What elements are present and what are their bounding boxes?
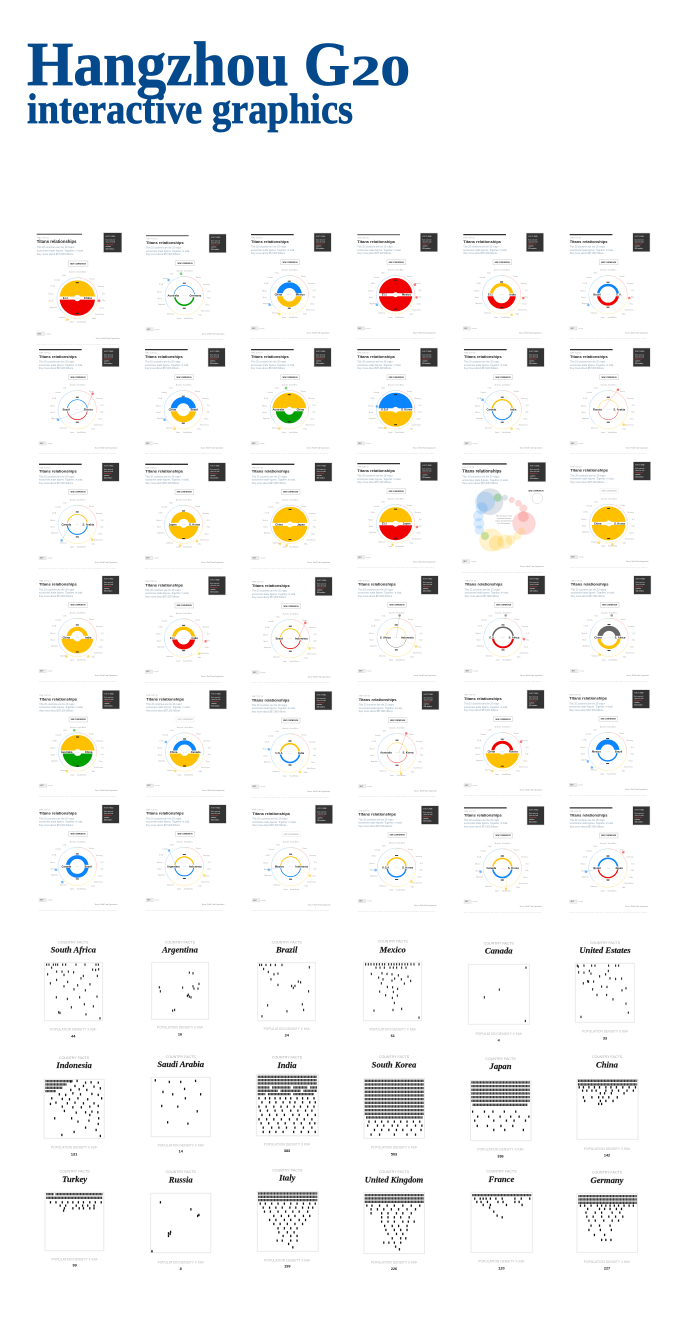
panel: China vs S. Korea	[570, 462, 651, 569]
chord: China vs Canada: China	[170, 750, 178, 754]
panel: Brazil vs Russia	[39, 348, 119, 455]
population dots	[578, 1196, 637, 1241]
chord: Australia vs China: China	[85, 750, 93, 754]
chord: E.U. vs India: India	[191, 636, 198, 640]
country facts: Brazil: POPULATION DENSITY X KM²	[264, 1027, 311, 1031]
country facts: Germany	[577, 1171, 638, 1270]
panel title: Titans relationships	[145, 469, 184, 474]
panel title: Titans relationships	[146, 240, 184, 245]
panel title: Titans relationships	[146, 811, 184, 816]
country facts: India: India	[276, 1060, 297, 1070]
chord: China vs Russia: Russia	[509, 750, 518, 754]
population dots	[260, 964, 309, 1017]
chord: China vs S. Africa: China	[594, 635, 602, 639]
population dots	[155, 1079, 201, 1125]
country facts: Germany: 227	[604, 1266, 610, 1270]
country facts: Italy: POPULATION DENSITY X KM²	[264, 1258, 311, 1262]
chord: E.U. vs S. Africa	[489, 614, 525, 650]
chord: Japan vs S. Korea	[169, 511, 201, 547]
chord: Canada vs S. Arabia	[60, 512, 95, 542]
panel: U.S.A vs S. Korea (2)	[358, 806, 439, 913]
population dots	[45, 1080, 102, 1137]
panel: E.U. vs Mexico	[357, 233, 438, 340]
panel: E.U. vs Japan	[357, 462, 438, 569]
chord: Argentina vs Indonesia: Indonesia	[189, 864, 202, 868]
chord: Australia vs China	[273, 387, 305, 430]
chord: U.S.A vs S. Korea: U.S.A	[381, 408, 388, 412]
chord: U.S.A vs India: India	[298, 751, 305, 755]
country facts: France: 120	[498, 1267, 505, 1271]
panel title: Titans relationships	[252, 583, 290, 588]
chord: China vs S. Korea: S. Korea	[614, 521, 626, 525]
population dots	[471, 1082, 530, 1131]
chord: E.U. vs Japan	[382, 509, 418, 546]
country facts: United Estates: COUNTRY FACTS	[590, 941, 621, 945]
country facts: Germany: POPULATION DENSITY X KM²	[584, 1260, 631, 1264]
country facts: Mexico: COUNTRY FACTS	[378, 940, 408, 944]
chord: Russia vs S. Arabia	[593, 388, 626, 426]
country facts: Indonesia: 131	[71, 1152, 77, 1156]
country facts: Indonesia: POPULATION DENSITY X KM²	[51, 1146, 98, 1150]
chord: Brazil vs Japan: Brazil	[593, 866, 601, 870]
panel title: Titans relationships	[570, 468, 609, 473]
population dots	[365, 1195, 424, 1250]
chord: Brazil vs Japan: Japan	[615, 866, 623, 870]
country facts: Argentina: POPULATION DENSITY X KM²	[157, 1026, 204, 1030]
chord: Canada vs India: Canada	[486, 408, 497, 412]
panel: China vs Russia	[464, 690, 544, 797]
chord: E.U. vs Mexico: E.U.	[382, 293, 387, 297]
chord: U.S.A vs India: U.S.A	[275, 751, 283, 755]
country facts: South Africa: COUNTRY FACTS	[58, 941, 89, 945]
subtitle: interactive graphics	[27, 87, 353, 133]
country facts: Brazil: COUNTRY FACTS	[272, 941, 302, 945]
new comparison mini ring: NEW COMPARISON	[528, 489, 544, 492]
country facts: Argentina: 16	[178, 1032, 182, 1036]
chord: E.U. vs Japan: E.U.	[382, 522, 387, 526]
panel: Japan vs S. Korea	[145, 463, 226, 570]
country facts: France: POPULATION DENSITY X KM²	[478, 1260, 525, 1264]
chord: Argentina vs Indonesia	[167, 849, 206, 878]
country facts: United Estates: POPULATION DENSITY X KM²	[582, 1030, 629, 1034]
chord: E.U. vs S. Africa: S. Africa	[509, 635, 520, 639]
country facts: United Kingdom: POPULATION DENSITY X KM²	[371, 1261, 418, 1265]
panel: U.S.A vs India	[252, 691, 332, 798]
country facts: Russia: Russia	[168, 1174, 193, 1184]
chord: S. Africa vs Indonesia: S. Africa	[380, 635, 391, 639]
panel title: Titans relationships	[571, 582, 609, 587]
country facts: China: 142	[604, 1154, 610, 1158]
panel title: Titans relationships	[357, 468, 396, 473]
panel: Australia vs Germany	[146, 234, 226, 341]
country facts: South Korea: POPULATION DENSITY X KM²	[371, 1146, 418, 1150]
panel: Australia vs China (2)	[39, 690, 120, 797]
country facts: Turkey: POPULATION DENSITY X KM²	[51, 1257, 99, 1261]
country facts: China: POPULATION DENSITY X KM²	[584, 1147, 631, 1151]
chord: China vs Mexico	[268, 281, 305, 315]
chord: Argentina vs Indonesia: Argentina	[167, 864, 180, 868]
chord: S. Africa vs Indonesia	[380, 614, 417, 650]
country facts: Canada: COUNTRY FACTS	[484, 941, 514, 945]
country facts: United Kingdom	[364, 1170, 424, 1271]
country facts: Saudi Arabia	[151, 1055, 210, 1154]
population dots	[152, 1201, 199, 1252]
chord: E.U. vs India: E.U.	[170, 636, 175, 640]
panel: E.U. vs S. Africa	[465, 576, 545, 683]
population dots	[47, 963, 100, 1019]
chord: China vs Japan: China	[275, 522, 283, 526]
chord: Canada vs Brazil	[55, 854, 92, 883]
country facts: Turkey: 99	[72, 1264, 77, 1268]
country facts: Canada: POPULATION DENSITY X KM²	[476, 1032, 523, 1036]
panel: E.U. vs India	[463, 233, 544, 340]
country facts: United Kingdom: 226	[391, 1267, 397, 1271]
panel title: Titans relationships	[357, 354, 396, 359]
panel: Mexico vs Brazil	[569, 690, 650, 797]
chord: China vs Japan	[275, 509, 305, 547]
chord: E.U. vs India	[170, 625, 207, 655]
chord: E.U. vs China: China	[84, 296, 92, 300]
panel: bubble overview of all countries	[462, 462, 546, 574]
country facts: Indonesia	[44, 1056, 104, 1156]
country facts: Argentina: Argentina	[161, 945, 199, 955]
panel: China vs Japan	[252, 463, 332, 570]
panel: China vs India	[39, 576, 119, 683]
chord: U.S.A vs S. Korea: S. Korea	[402, 865, 414, 869]
chord: Canada vs Brazil: Brazil	[85, 864, 92, 868]
country facts: Japan	[470, 1057, 531, 1158]
country facts: Japan: 336	[497, 1154, 504, 1158]
bubble ring	[473, 488, 536, 552]
chord: Brazil vs Russia: Brazil	[63, 408, 70, 412]
country facts: China	[577, 1055, 638, 1158]
country facts: United Kingdom: COUNTRY FACTS	[379, 1170, 410, 1174]
panel title: Titans relationships	[39, 811, 77, 816]
country facts: South Africa: POPULATION DENSITY X KM²	[50, 1028, 97, 1032]
country facts: Japan: Japan	[489, 1061, 512, 1071]
chord: Canada vs S. Korea: S. Korea	[508, 866, 519, 870]
chord: U.S.A vs S. Korea	[376, 395, 413, 429]
panel: Canada vs S. Korea	[464, 806, 544, 913]
country facts: Germany: COUNTRY FACTS	[592, 1171, 623, 1175]
country facts: Turkey: Turkey	[62, 1174, 87, 1184]
chord: Australia vs S. Korea: S. Korea	[403, 751, 414, 755]
panel: Mexico vs Indonesia	[252, 805, 333, 912]
panel: Canada vs S. Arabia	[39, 463, 119, 570]
chord: Japan vs S. Korea: Japan	[169, 522, 177, 526]
chord: China vs Canada	[165, 739, 201, 772]
country facts: Russia	[151, 1170, 211, 1271]
country facts: Italy: 199	[284, 1265, 290, 1269]
panel title: Titans relationships	[570, 812, 608, 817]
country facts: Italy	[257, 1169, 318, 1269]
chord: S. Africa vs Indonesia: Indonesia	[401, 635, 414, 639]
chord: Australia vs China: Australia	[273, 408, 285, 412]
chord: China vs Russia: China	[488, 750, 496, 754]
chord: E.U. vs India	[488, 282, 525, 316]
country facts: Turkey	[45, 1169, 104, 1268]
panel: China vs Mexico	[251, 233, 331, 340]
chord: Canada vs S. Korea	[479, 856, 519, 890]
panel title: Titans relationships	[358, 812, 397, 817]
country facts: France: France	[488, 1174, 514, 1184]
country facts: India	[256, 1056, 318, 1153]
country facts: Argentina	[152, 941, 209, 1036]
population dots	[577, 964, 628, 1018]
chord: U.S.A vs S. Korea: U.S.A	[382, 865, 389, 869]
chord: Canada vs S. Arabia: Canada	[61, 522, 72, 526]
panel title: Titans relationships	[37, 239, 77, 244]
population dots	[578, 1081, 637, 1105]
chord: Canada vs S. Korea: Canada	[486, 866, 497, 870]
bubble note: The size of each circle	[496, 516, 512, 518]
chord: China vs India	[63, 625, 92, 658]
country facts: South Korea: South Korea	[372, 1059, 417, 1069]
chord: E.U. vs S. Africa: E.U.	[489, 635, 495, 639]
chord: Australia vs Germany: Australia	[168, 294, 180, 298]
country facts: India: 383	[284, 1149, 290, 1153]
country facts: Italy: COUNTRY FACTS	[272, 1169, 303, 1173]
chord: Russia vs S. Arabia: Russia	[593, 408, 602, 412]
chord: Australia vs China: China	[297, 408, 305, 412]
chord: Australia vs S. Korea: Australia	[380, 751, 392, 755]
chord: China vs S. Korea: China	[594, 521, 602, 525]
chord: China vs India: India	[85, 635, 92, 639]
panel: Canada vs Brazil	[39, 805, 119, 912]
chord: Brazil vs E.U.: Brazil	[593, 293, 601, 297]
panel title: Titans relationships	[251, 354, 289, 359]
chord: Brazil vs E.U.	[587, 282, 631, 307]
chord: China vs Mexico: China	[275, 293, 283, 297]
chord: Australia vs China	[61, 729, 93, 773]
country facts: India: POPULATION DENSITY X KM²	[264, 1143, 311, 1147]
chord: E.U. vs China	[63, 283, 100, 321]
chord: Brazil vs Indonesia: Indonesia	[295, 637, 308, 641]
panel: Argentina vs Indonesia	[146, 805, 226, 912]
country facts: South Korea: 503	[391, 1152, 397, 1156]
chord: Mexico vs Brazil	[587, 738, 623, 769]
chord: China vs Brazil: China	[169, 408, 177, 412]
country facts: Canada	[468, 941, 529, 1043]
country facts: United Estates	[575, 941, 634, 1040]
chord: Canada vs S. Arabia: S. Arabia	[83, 522, 95, 526]
country facts: Saudi Arabia: Saudi Arabia	[157, 1059, 205, 1069]
country facts: United Estates: United Estates	[579, 945, 631, 955]
country facts: Brazil	[258, 941, 315, 1038]
panel: Brazil vs Indonesia	[252, 577, 332, 684]
country facts: Germany: Germany	[591, 1175, 624, 1185]
panel: Brazil vs Japan	[570, 806, 650, 913]
panel title: Titans relationships	[39, 582, 77, 587]
panel: U.S.A vs S. Korea	[357, 348, 438, 455]
chord: E.U. vs Japan: Japan	[403, 522, 411, 526]
panel title: Titans relationships	[358, 582, 396, 587]
country facts: Mexico: 61	[391, 1034, 395, 1038]
country facts: South Africa: 44	[71, 1034, 76, 1038]
panel: S. Africa vs Indonesia	[358, 576, 438, 683]
panel title: Titans relationships	[462, 469, 502, 474]
country facts: Canada: 4	[498, 1039, 501, 1043]
panel: China vs Canada	[146, 690, 227, 797]
country facts: Italy: Italy	[278, 1173, 296, 1183]
panel: China vs Brazil	[145, 348, 225, 455]
bubble note: the G20 members	[498, 522, 511, 525]
country facts: India: COUNTRY FACTS	[272, 1056, 303, 1060]
chord: Mexico vs Brazil: Mexico	[592, 749, 602, 753]
panel title: Titans relationships	[464, 354, 502, 359]
country facts: Russia: 8	[180, 1267, 182, 1271]
panel title: Titans relationships	[251, 239, 289, 244]
chord: Mexico vs Indonesia: Mexico	[275, 865, 285, 869]
chord: China vs Brazil	[163, 396, 198, 430]
population dots	[159, 971, 199, 1012]
country facts: Mexico	[363, 940, 422, 1038]
population dots	[365, 1081, 424, 1136]
panel: Russia vs S. Arabia	[570, 348, 650, 455]
chord: E.U. vs China: E.U.	[63, 296, 69, 300]
chord: Russia vs S. Arabia: S. Arabia	[614, 408, 626, 412]
chord: China vs Brazil: Brazil	[191, 408, 198, 412]
bubble note	[495, 516, 513, 525]
chord: U.S.A vs India	[268, 741, 305, 773]
panel: E.U. vs India (2)	[145, 576, 226, 683]
chord: Brazil vs Indonesia	[276, 621, 311, 651]
chord: Canada vs India: India	[510, 408, 517, 412]
country facts: Russia: POPULATION DENSITY X KM²	[158, 1260, 205, 1264]
panel: Brazil vs E.U.	[570, 233, 650, 340]
panel: Australia vs S. Korea	[359, 691, 439, 798]
chord: Brazil vs Russia: Russia	[84, 408, 93, 412]
chord: U.S.A vs S. Korea: S. Korea	[401, 408, 413, 412]
country facts: South Korea	[364, 1055, 424, 1156]
country facts: France	[471, 1169, 532, 1271]
panel title: Titans relationships	[463, 239, 502, 244]
panel title: Titans relationships	[570, 354, 608, 359]
country facts: Indonesia: COUNTRY FACTS	[59, 1056, 90, 1060]
chord: Mexico vs Indonesia: Indonesia	[295, 865, 308, 869]
chord: Brazil vs Japan	[585, 851, 625, 880]
title: 20	[351, 49, 410, 95]
panel title: Titans relationships	[39, 469, 77, 474]
chord: Brazil vs Russia	[57, 392, 94, 422]
panel title: Titans relationships	[359, 697, 397, 702]
population dots	[258, 1077, 317, 1133]
country facts: Russia: COUNTRY FACTS	[166, 1170, 196, 1174]
panel title: Titans relationships	[465, 582, 503, 587]
chord: E.U. vs Mexico: Mexico	[402, 293, 412, 297]
panel: Canada vs India	[464, 348, 544, 455]
country facts: Indonesia: Indonesia	[55, 1060, 92, 1070]
chord: China vs Japan: Japan	[297, 522, 305, 526]
country facts: South Korea: COUNTRY FACTS	[379, 1055, 410, 1059]
panel title: Titans relationships	[357, 239, 396, 244]
chord: Canada vs India	[481, 397, 517, 430]
population dots	[472, 1195, 531, 1218]
chord: China vs S. Korea	[594, 508, 626, 546]
panel title: Titans relationships	[39, 354, 77, 359]
population dots	[366, 963, 419, 1019]
chord: U.S.A vs S. Korea	[374, 855, 414, 883]
country facts: Brazil: 24	[285, 1034, 290, 1038]
panel title: Titans relationships	[252, 811, 291, 816]
chord: E.U. vs India: E.U.	[488, 293, 493, 297]
country facts: Brazil: Brazil	[275, 945, 298, 955]
chord: Canada vs Brazil: Canada	[61, 864, 72, 868]
panel title: Titans relationships	[569, 696, 608, 701]
country facts: Mexico: POPULATION DENSITY X KM²	[370, 1028, 417, 1032]
country facts: Japan: COUNTRY FACTS	[485, 1057, 516, 1061]
country facts: Saudi Arabia: POPULATION DENSITY X KM²	[158, 1143, 205, 1147]
chord: China vs S. Africa: S. Africa	[615, 635, 626, 639]
chord: E.U. vs Mexico	[376, 280, 418, 309]
country facts: France: COUNTRY FACTS	[486, 1169, 517, 1173]
chord: China vs Canada: Canada	[191, 750, 201, 754]
country facts: United Estates: 33	[603, 1036, 607, 1040]
chord: Brazil vs Indonesia: Brazil	[276, 637, 283, 641]
chord: Brazil vs E.U.: E.U.	[616, 293, 622, 297]
country facts: Saudi Arabia: COUNTRY FACTS	[166, 1055, 196, 1059]
panel title: Titans relationships	[145, 582, 184, 587]
chord: China vs S. Africa	[594, 614, 626, 656]
population dots	[258, 1193, 317, 1248]
chord: Mexico vs Brazil: Brazil	[615, 749, 623, 753]
panel title: Titans relationships	[145, 354, 183, 359]
chord: China vs Russia	[488, 739, 522, 772]
bubble note: represents the total	[497, 517, 511, 520]
country facts: South Africa: South Africa	[51, 945, 97, 955]
population dots	[46, 1194, 102, 1212]
country facts: China: COUNTRY FACTS	[592, 1055, 623, 1059]
panel title: Titans relationships	[464, 812, 502, 817]
country facts: South Africa	[44, 941, 103, 1038]
chord: E.U. vs India: India	[509, 293, 516, 297]
country facts: Argentina: COUNTRY FACTS	[165, 941, 196, 945]
panel title: Titans relationships	[252, 469, 290, 474]
country facts: United Kingdom: United Kingdom	[365, 1174, 424, 1184]
panel: Australia vs China	[251, 348, 331, 455]
panel title: Titans relationships	[39, 696, 78, 701]
panel title: Titans relationships	[464, 696, 502, 701]
panel title: Titans relationships	[570, 239, 608, 244]
country facts: China: China	[596, 1059, 619, 1069]
chord: Australia vs Germany	[167, 272, 202, 308]
title: Hangzhou G	[27, 31, 350, 99]
chord: China vs India: China	[63, 635, 71, 639]
country facts: Canada: Canada	[485, 946, 513, 956]
chord: Australia vs China: Australia	[61, 750, 73, 754]
panel: E.U. vs China	[37, 233, 122, 346]
country facts: Mexico: Mexico	[379, 944, 406, 954]
chord: China vs Mexico: Mexico	[296, 293, 305, 297]
country facts: Turkey: COUNTRY FACTS	[59, 1169, 90, 1173]
panel: China vs S. Africa	[571, 576, 651, 683]
panel title: Titans relationships	[252, 697, 290, 702]
country facts: Japan: POPULATION DENSITY X KM²	[477, 1148, 525, 1152]
bubble note: volume of trade between	[495, 520, 513, 522]
country facts: Saudi Arabia: 14	[179, 1150, 184, 1154]
chord: Mexico vs Indonesia	[268, 854, 311, 879]
population dots	[484, 966, 526, 1022]
panel title: Titans relationships	[146, 696, 185, 701]
chord: Japan vs S. Korea: S. Korea	[189, 522, 201, 526]
chord: Australia vs S. Korea	[380, 732, 414, 775]
chord: Australia vs Germany: Germany	[189, 294, 202, 298]
